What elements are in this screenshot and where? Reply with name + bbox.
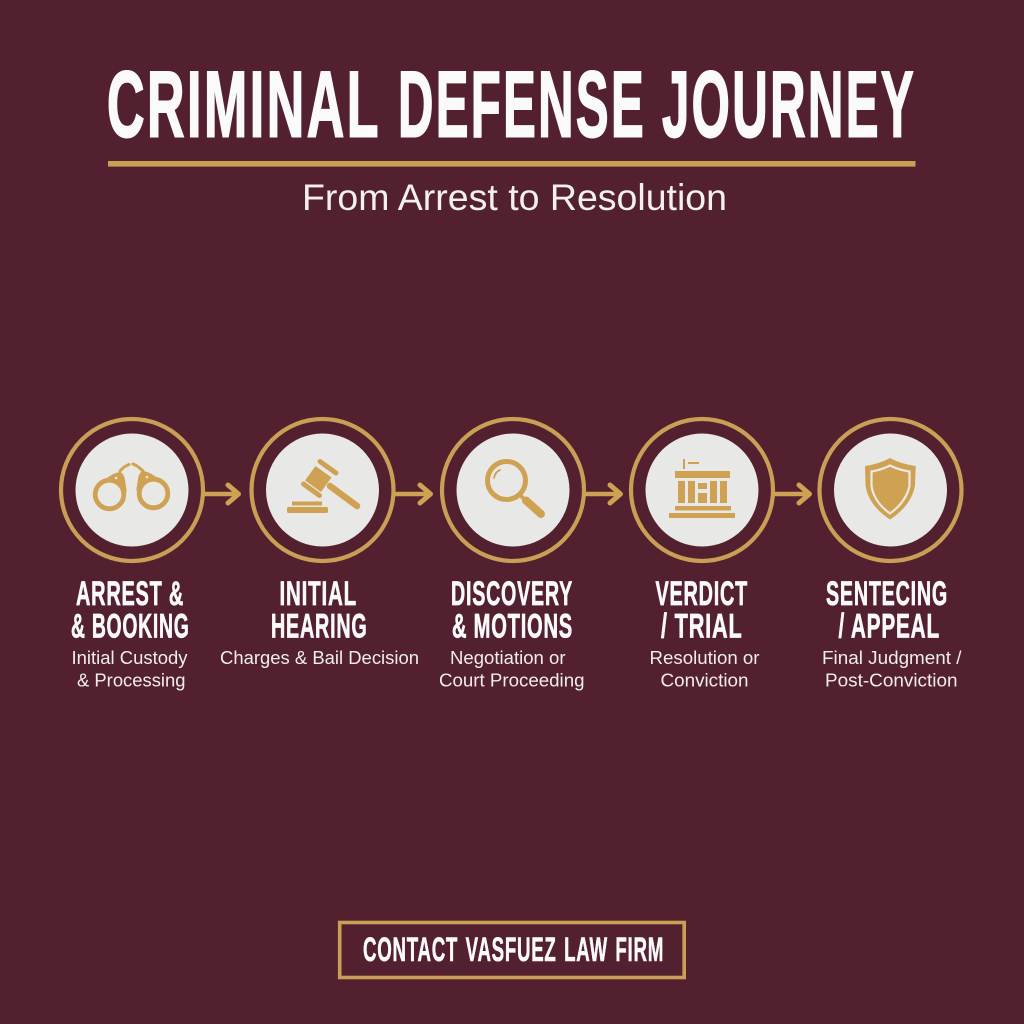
contact button <box>340 922 684 978</box>
icon: shield in ring <box>820 419 962 561</box>
arrow 2 <box>395 485 430 503</box>
arrow 1 <box>205 485 238 503</box>
heading: VERDICT <box>656 575 748 613</box>
heading: & BOOKING <box>71 608 190 646</box>
heading: HEARING <box>271 608 368 646</box>
step 1: arrest and booking <box>61 419 203 690</box>
contact button: CONTACT VASFUEZ LAW FIRM <box>363 931 664 969</box>
title underline <box>108 161 916 167</box>
step 5: sentencing and appeal <box>820 419 962 690</box>
description: Final Judgment / <box>822 647 962 668</box>
icon: gavel in ring <box>252 419 394 561</box>
heading: INITIAL <box>280 575 357 613</box>
description <box>439 647 584 690</box>
heading: & MOTIONS <box>452 608 573 646</box>
description: Conviction <box>660 670 748 690</box>
subtitle: From Arrest to Resolution <box>302 176 727 218</box>
heading <box>71 575 190 646</box>
heading: ARREST & <box>76 575 184 613</box>
icon: courthouse in ring <box>631 419 773 561</box>
description: Court Proceeding <box>439 670 584 690</box>
heading <box>656 575 748 646</box>
description: Resolution or <box>650 647 760 668</box>
description: & Processing <box>77 670 186 690</box>
heading <box>826 575 948 646</box>
title <box>107 52 916 156</box>
title: DEFENSE <box>398 52 646 156</box>
description: Charges & Bail Decision <box>220 647 419 668</box>
step 2: initial hearing <box>220 419 419 668</box>
description: Post-Conviction <box>825 670 958 690</box>
icon: handcuffs in ring <box>61 419 203 561</box>
heading: / TRIAL <box>661 608 742 646</box>
step 3: discovery and motions <box>439 419 584 690</box>
arrow 3 <box>586 485 620 503</box>
description <box>822 647 962 690</box>
heading <box>271 575 368 646</box>
arrow 4 <box>775 485 810 503</box>
description <box>72 647 188 690</box>
heading: / APPEAL <box>838 608 940 646</box>
icon: magnifying glass in ring <box>442 419 584 561</box>
step 4: verdict and trial <box>631 419 773 690</box>
heading: DISCOVERY <box>451 575 573 613</box>
description: Negotiation or <box>450 647 566 668</box>
title: CRIMINAL <box>107 52 381 156</box>
description <box>650 647 760 690</box>
heading <box>451 575 573 646</box>
description: Initial Custody <box>72 647 188 668</box>
